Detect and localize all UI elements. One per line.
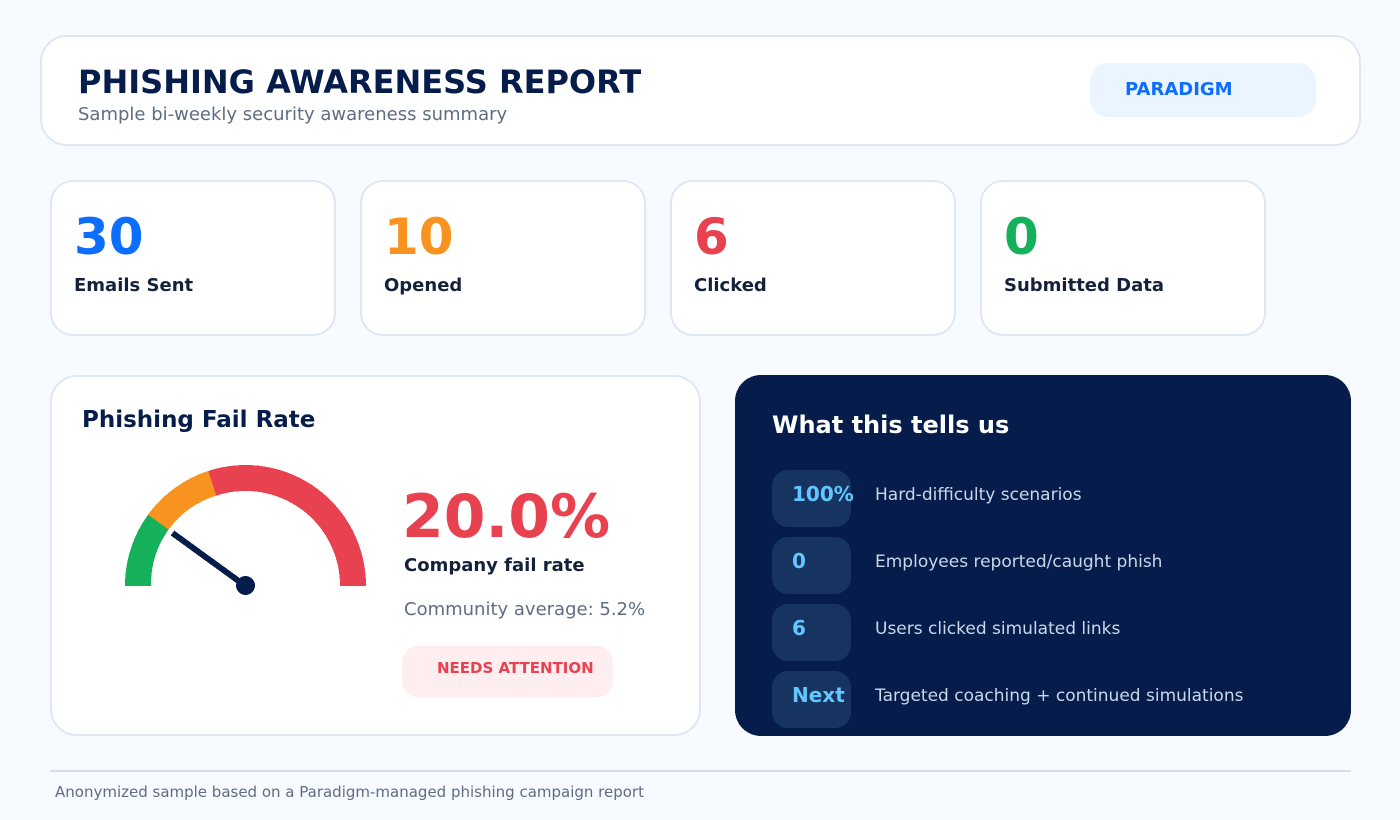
insight row: reported — [772, 537, 1162, 594]
company fail rate label: Company fail rate — [404, 555, 585, 576]
insight row: hard difficulty: 100% — [792, 482, 854, 506]
gauge — [125, 465, 366, 595]
insight row: hard difficulty: Hard-difficulty scenarios — [875, 485, 1082, 505]
stat card: clicked: 6 — [694, 208, 729, 266]
insight row: clicked — [772, 604, 1120, 661]
community average: Community average: 5.2% — [404, 599, 645, 620]
stat card: opened: 10 — [384, 208, 454, 266]
status badge: NEEDS ATTENTION — [437, 659, 594, 677]
insights heading: What this tells us — [772, 411, 1009, 439]
panel: fail rate — [51, 376, 700, 735]
header panel — [41, 36, 1360, 145]
stat card: clicked: Clicked — [694, 275, 767, 296]
stat card: clicked — [671, 181, 955, 335]
stat card: emails sent — [51, 181, 335, 335]
stat card: opened: Opened — [384, 275, 462, 296]
insight row: next — [772, 671, 1244, 728]
stat card: submitted data: Submitted Data — [1004, 275, 1164, 296]
stat card: submitted data: 0 — [1004, 208, 1039, 266]
insight row: next: Next — [792, 683, 845, 707]
insight row: next: Targeted coaching + continued simulations — [874, 686, 1244, 706]
insight row: clicked: Users clicked simulated links — [875, 619, 1120, 639]
brand badge: PARADIGM — [1125, 79, 1233, 100]
stat card: opened — [361, 181, 645, 335]
fail rate value: 20.0% — [402, 482, 610, 552]
title: PHISHING AWARENESS REPORT — [78, 63, 641, 101]
stat card: emails sent: 30 — [74, 208, 144, 266]
stat card: submitted data — [981, 181, 1265, 335]
insight row: reported: 0 — [792, 549, 806, 573]
brand badge — [1090, 63, 1316, 117]
insight row: hard difficulty — [772, 470, 1082, 527]
stat card: emails sent: Emails Sent — [74, 275, 194, 296]
status badge — [402, 646, 613, 697]
footer note: Anonymized sample based on a Paradigm-managed phishing campaign report — [55, 783, 644, 801]
panel: what this tells us — [735, 375, 1351, 736]
insight row: clicked: 6 — [792, 616, 806, 640]
insight row: reported: Employees reported/caught phish — [875, 552, 1162, 572]
subtitle: Sample bi-weekly security awareness summary — [78, 104, 508, 125]
fail rate heading: Phishing Fail Rate — [82, 407, 315, 433]
